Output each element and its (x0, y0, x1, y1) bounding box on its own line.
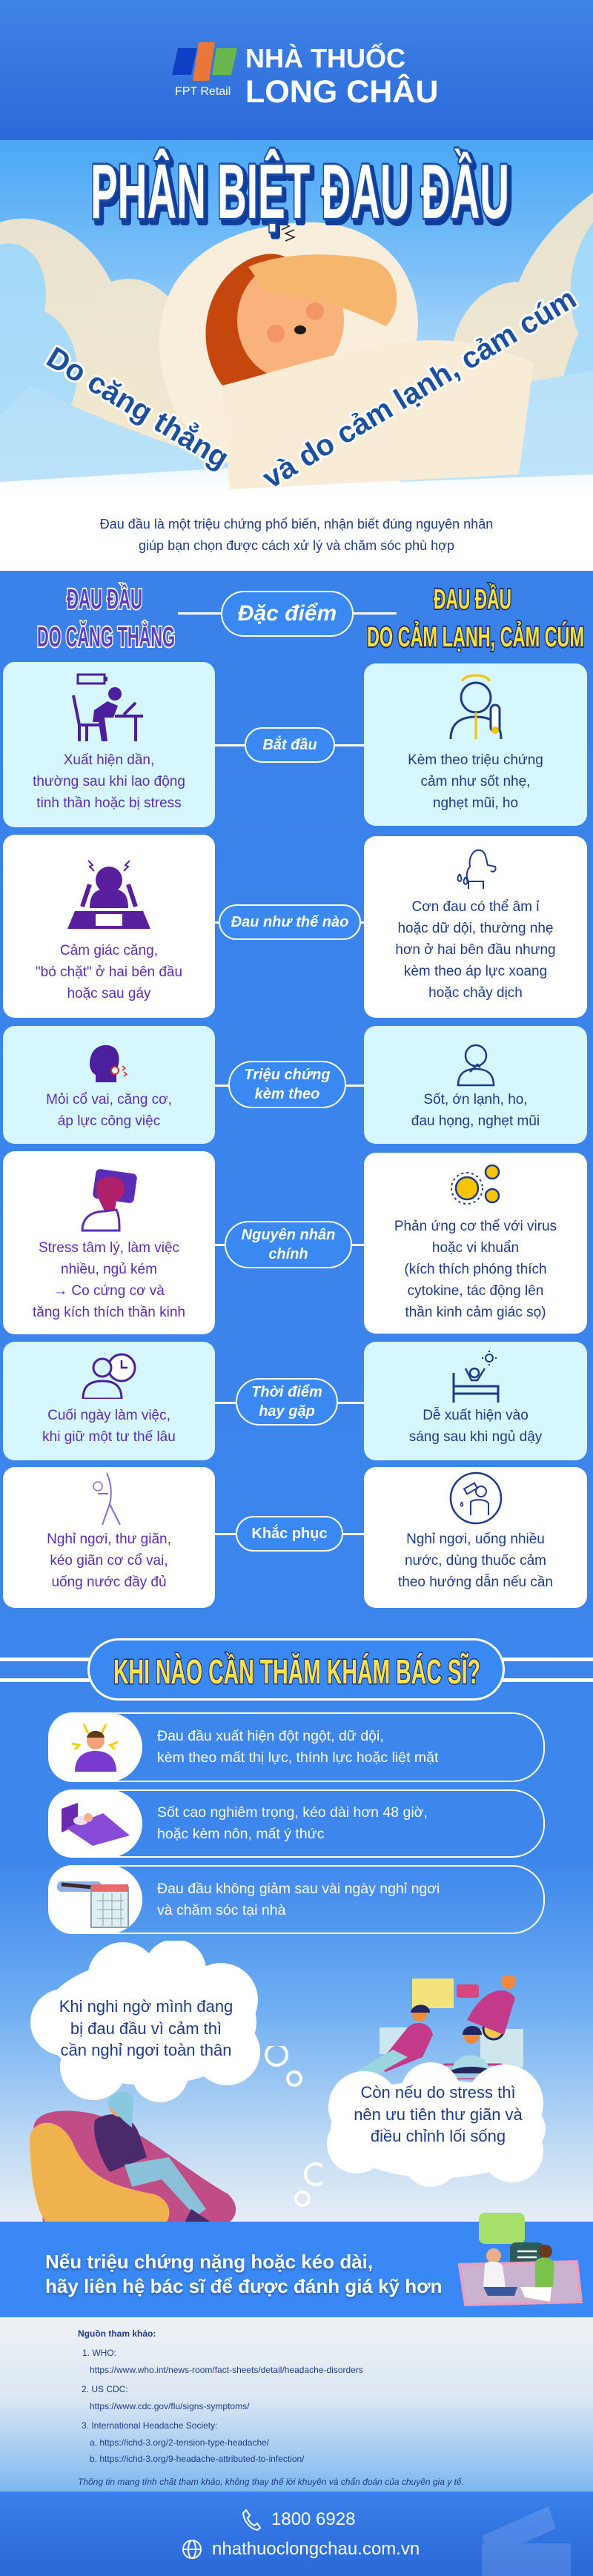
text: điều chỉnh lối sống (371, 2127, 506, 2145)
text (45, 2250, 442, 2299)
doctor card 3 (48, 1865, 545, 1934)
icon: person holding head over paper (67, 860, 150, 929)
text: Phản ứng cơ thể với virus (394, 1219, 557, 1234)
text: tinh thần hoặc bị stress (36, 795, 182, 811)
text (394, 1219, 557, 1320)
text: Mỏi cổ vai, căng cơ, (46, 1092, 172, 1107)
text: Stress tâm lý, làm việc (39, 1240, 179, 1256)
arm (248, 254, 397, 326)
column header: tension (37, 582, 175, 652)
website: nhathuoclongchau.com.vn (212, 2539, 420, 2559)
text: bị đau đầu vì cảm thì (70, 2019, 222, 2037)
icon: waking up in bed with sun (452, 1351, 500, 1403)
icon: FPT logo (172, 42, 237, 81)
column header: cold/flu: ĐAU ĐẦU (434, 583, 511, 615)
text: nước, dùng thuốc cảm (405, 1553, 546, 1569)
subtitle: curved captions: và do cảm lạnh, cảm cúm (257, 282, 582, 495)
illustration: right busy people (356, 1976, 523, 2079)
text (395, 899, 556, 1001)
icon: headache man (48, 1712, 142, 1782)
text: kéo giãn cơ cổ vai, (50, 1553, 168, 1569)
text (157, 1804, 428, 1842)
icon: runny nose profile (457, 850, 497, 889)
text (409, 1407, 543, 1445)
comparison section background (0, 571, 593, 2222)
footer (0, 2491, 593, 2576)
text: Cảm giác căng, (60, 943, 158, 958)
text: và chăm sóc tại nhà (157, 1902, 285, 1918)
logo (172, 42, 438, 110)
text (47, 1532, 171, 1590)
text: hoặc chảy dịch (428, 985, 523, 1001)
blanket (222, 340, 534, 489)
banner: contact doctor (0, 2222, 593, 2317)
text: nên ưu tiên thư giãn và (354, 2105, 523, 2123)
references list: 1. WHO: (82, 2348, 116, 2358)
text: kèm theo áp lực xoang (404, 964, 547, 979)
subtitle: curved captions (41, 282, 582, 495)
pill: Đau như thế nào (219, 904, 361, 940)
header band (0, 0, 593, 140)
icon: person with thermometer (449, 675, 503, 739)
illustration: consultation on sofa (458, 2213, 584, 2317)
icon: phone (242, 2509, 261, 2531)
intro paragraph: Đau đầu là một triệu chứng phổ biến, nhận biết đúng nguyên nhân (100, 517, 493, 532)
text (33, 752, 185, 811)
references section: 3. International Headache Society: (82, 2420, 217, 2431)
text: Nếu triệu chứng nặng hoặc kéo dài, (45, 2251, 373, 2273)
thought bubble: right (319, 2062, 557, 2188)
text: nghẹt mũi, ho (433, 795, 518, 811)
icon: viruses (451, 1164, 500, 1205)
pill: Nguyên nhân chính (225, 1221, 352, 1268)
icon: stretching person (93, 1472, 121, 1526)
icon: stressed worker at desk (72, 673, 143, 741)
row 6 right card (364, 1467, 587, 1608)
text: cần nghỉ ngơi toàn thân (61, 2041, 231, 2059)
text: Đau đầu xuất hiện đột ngột, dữ dội, (157, 1728, 384, 1744)
icon: resting with calendar (48, 1865, 142, 1934)
text: Kèm theo triệu chứng (408, 752, 543, 768)
pill: Thời điểm hay gặp: hay gặp (259, 1403, 315, 1420)
row 2 right card (364, 836, 587, 1018)
intro paragraph: giúp bạn chọn được cách xử lý và chăm sóc phù hợp (139, 538, 454, 553)
thought bubble: left (30, 1941, 260, 2102)
references section: https://www.cdc.gov/flu/signs-symptoms/ (90, 2401, 249, 2411)
references heading: Nguồn tham khảo: (78, 2328, 156, 2339)
text: áp lực công việc (58, 1113, 160, 1129)
references section: b. https://ichd-3.org/9-headache-attributed-to-infection/ (90, 2454, 304, 2464)
text (411, 1092, 540, 1129)
decorative store (474, 2499, 586, 2576)
text: Nghỉ ngơi, thư giãn, (47, 1532, 171, 1547)
text: hãy liên hệ bác sĩ để được đánh giá kỹ hơn (45, 2275, 442, 2297)
text: FPT Retail: FPT Retail (175, 85, 231, 98)
connectors (215, 744, 364, 746)
pill: Nguyên nhân chính: Nguyên nhân (242, 1227, 335, 1243)
pill: Đặc điểm: Đặc điểm (238, 601, 337, 626)
heading: Khi nào cần thăm khám bác sĩ (87, 1638, 505, 1701)
pill: Bắt đầu: Bắt đầu (262, 737, 317, 753)
text: Cơn đau có thể âm ỉ (412, 899, 539, 915)
text: hoặc dữ dội, thường nhẹ (397, 921, 554, 936)
references section: 2. US CDC: (82, 2384, 128, 2394)
text (46, 1092, 172, 1129)
row 6 left card (3, 1467, 215, 1608)
references section: a. https://ichd-3.org/2-tension-type-headache/ (90, 2437, 269, 2448)
hero illustration (0, 193, 593, 489)
pill: Khắc phục (236, 1516, 343, 1552)
text: đau họng, nghẹt mũi (411, 1113, 540, 1129)
text (157, 1880, 440, 1918)
text: Đau đầu không giảm sau vài ngày nghỉ ngơi (157, 1880, 440, 1896)
hero section (0, 140, 593, 571)
icon: man with clock (82, 1354, 136, 1399)
decorative stripes for doctor heading (0, 1658, 593, 1661)
text (59, 1997, 233, 2059)
pill: Nguyên nhân chính: chính (268, 1246, 308, 1262)
intro paragraph (99, 517, 493, 553)
thought bubble dots (265, 2046, 322, 2207)
row 4 right card (364, 1153, 587, 1334)
row 1 left card (3, 662, 215, 827)
text: (kích thích phóng thích (404, 1262, 547, 1277)
text: hoặc kèm nôn, mất ý thức (157, 1826, 325, 1842)
text: theo hướng dẫn nếu cần (398, 1575, 553, 1590)
pill: Triệu chứng kèm theo: Triệu chứng (244, 1067, 331, 1083)
face (237, 261, 344, 380)
references section: https://www.who.int/news-room/fact-sheets/detail/headache-disorders (90, 2365, 363, 2375)
pill: Đau như thế nào: Đau như thế nào (231, 914, 348, 930)
text: sáng sau khi ngủ dậy (409, 1429, 542, 1445)
text: nhiều, ngủ kém (61, 1262, 157, 1277)
text: hơn ở hai bên đầu nhưng (395, 942, 556, 958)
text: "bó chặt" ở hai bên đầu (36, 964, 182, 980)
text: Xuất hiện dần, (64, 752, 154, 768)
icon: sick in bed (48, 1789, 142, 1858)
text (408, 752, 543, 811)
icon: coughing person (457, 1044, 495, 1087)
disclaimer: Thông tin mang tính chất tham khảo, không thay thế lời khuyên và chẩn đoán của chuyên gia y tế. (78, 2477, 464, 2487)
text: Sốt, ớn lạnh, ho, (423, 1092, 528, 1107)
row 3 right card (364, 1026, 587, 1144)
text: brand name: LONG CHÂU (245, 74, 438, 110)
illustration: person in armchair (28, 2076, 243, 2239)
pillow (159, 222, 424, 482)
row 3 left card (3, 1026, 215, 1144)
text: Cuối ngày làm việc, (47, 1408, 170, 1423)
pill: Thời điểm hay gặp: Thời điểm (251, 1384, 322, 1400)
text: → Co cứng cơ và (53, 1283, 165, 1299)
text (319, 2082, 557, 2147)
phone (242, 2508, 355, 2532)
icon: head with neck pain (90, 1045, 127, 1082)
text (398, 1532, 553, 1590)
doctor card 2 (48, 1789, 545, 1858)
text: hoặc sau gáy (67, 986, 151, 1001)
pill: Triệu chứng kèm theo (228, 1061, 346, 1108)
icon: stressed head profile (82, 1169, 137, 1232)
text (36, 943, 182, 1001)
text: thường sau khi lao động (33, 774, 185, 789)
column header: cold/flu (367, 582, 584, 652)
text: Còn nếu do stress thì (360, 2083, 516, 2102)
text (157, 1728, 439, 1766)
text: Nghỉ ngơi, uống nhiều (406, 1532, 545, 1547)
text: tăng kích thích thần kinh (33, 1305, 185, 1320)
doctor card 1 (48, 1712, 545, 1782)
text: cytokine, tác động lên (408, 1283, 543, 1299)
text: kèm theo mất thị lực, thính lực hoặc liệt mặt (157, 1749, 438, 1766)
hair (206, 254, 311, 406)
text: thần kinh cảm giác sọ) (405, 1305, 546, 1320)
row 4 left card (3, 1151, 215, 1334)
text: cảm như sốt nhẹ, (421, 774, 530, 789)
text: Sốt cao nghiêm trọng, kéo dài hơn 48 giờ, (157, 1804, 428, 1821)
text (33, 1240, 185, 1320)
row 1 right card (364, 663, 587, 826)
text: Dễ xuất hiện vào (423, 1408, 529, 1423)
text: uống nước đầy đủ (51, 1575, 167, 1590)
row 5 left card (3, 1342, 215, 1460)
icon: drinking water circle (449, 1472, 503, 1524)
phone: 1800 6928 (271, 2509, 355, 2529)
pill: Bắt đầu (245, 727, 335, 763)
text: Khi nghi ngờ mình đang (59, 1997, 233, 2016)
icon: globe (182, 2539, 202, 2560)
pill: Khắc phục: Khắc phục (251, 1526, 328, 1542)
pill: Triệu chứng kèm theo: kèm theo (255, 1086, 319, 1102)
text: brand name: NHÀ THUỐC (245, 43, 405, 73)
text: brand name (245, 43, 438, 110)
pill: Thời điểm hay gặp (236, 1378, 338, 1426)
subtitle: curved captions: Do căng thẳng (41, 339, 236, 475)
references section (0, 2317, 593, 2491)
row 5 right card (364, 1342, 587, 1460)
text (42, 1408, 176, 1445)
text: khi giữ một tư thế lâu (42, 1429, 176, 1445)
row 2 left card (3, 835, 215, 1018)
pill: Đặc điểm (221, 591, 354, 637)
text: hoặc vi khuẩn (432, 1240, 519, 1256)
